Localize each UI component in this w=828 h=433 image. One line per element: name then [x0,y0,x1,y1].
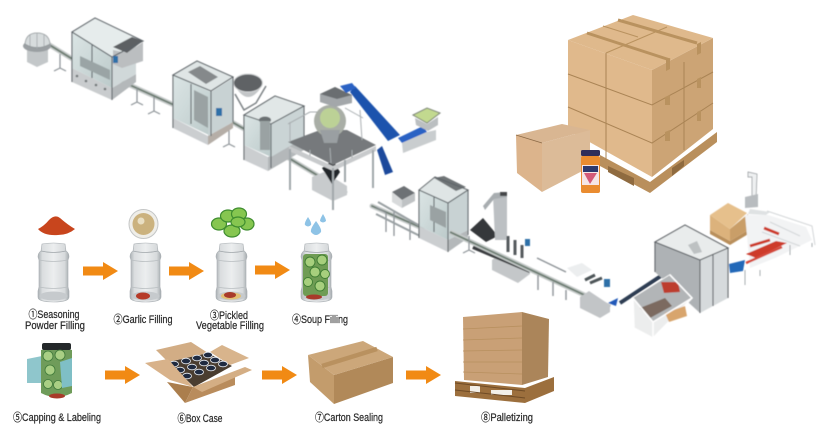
case erector [633,275,692,338]
conveyor: upper line segments [48,44,422,228]
step 1: seasoning powder filling: Powder Filling [25,320,85,332]
machine: liquid filler [419,176,468,252]
blue incline conveyor [340,83,440,175]
checkweigher conveyor section [376,186,424,240]
capper with cap elevator [470,192,530,283]
step 1: seasoning powder filling [25,216,85,332]
machine: first filler [72,18,143,100]
step 4: soup filling [292,214,348,326]
step 5: capping and labeling: ⑤Capping & Labeling [13,411,101,424]
step 2: garlic filling [114,210,172,326]
step 3: pickled vegetable filling: Vegetable Filling [196,320,264,332]
open-side carton beside pallet [516,124,590,192]
step 8: palletized load: ⑧Palletizing [481,411,533,424]
stands under conveyor [54,54,235,147]
step 3: pickled vegetable filling: ③Pickled [210,309,248,322]
step 8: palletized load [455,312,554,424]
step 7: sealed carton [308,341,393,424]
machine: third filler [244,96,304,171]
step 4: soup filling: ④Soup Filling [292,313,348,326]
palletizing robot arm [745,172,770,215]
arrow 4 [105,366,140,384]
step 1: seasoning powder filling: ①Seasoning [28,308,80,321]
pallet base [600,132,717,193]
arrow 6 [406,366,441,384]
case packer enclosure [620,225,745,313]
arrow 2 [169,262,204,280]
carton on pallet beside robot [710,203,750,245]
arrow 5 [262,366,297,384]
box stack top [568,15,713,70]
carton sealer and white conveyors [745,211,815,285]
step 3: pickled vegetable filling [196,208,264,332]
machine: second filler [173,61,233,145]
production line: filling machines and conveyors [23,18,815,338]
step 7: sealed carton: ⑦Carton Sealing [315,411,383,424]
large pallet stack of boxes [568,15,717,193]
conveyor: lower line [450,232,610,307]
hopper feeder [234,74,266,110]
step 6: open box case [145,342,252,425]
arrow 3 [255,261,290,279]
step 5: capping and labeling [13,343,101,424]
box stack left face [568,40,652,177]
product jar beside carton [581,150,600,193]
box stack right face [652,38,713,177]
step 6: open box case: ⑥Box Case [178,412,222,425]
arrow 1 [83,262,118,280]
step 2: garlic filling: ②Garlic Filling [114,313,172,326]
multihead weigher with platform [288,87,376,210]
rotary bottle table [23,33,51,67]
labeling machine [567,263,618,318]
